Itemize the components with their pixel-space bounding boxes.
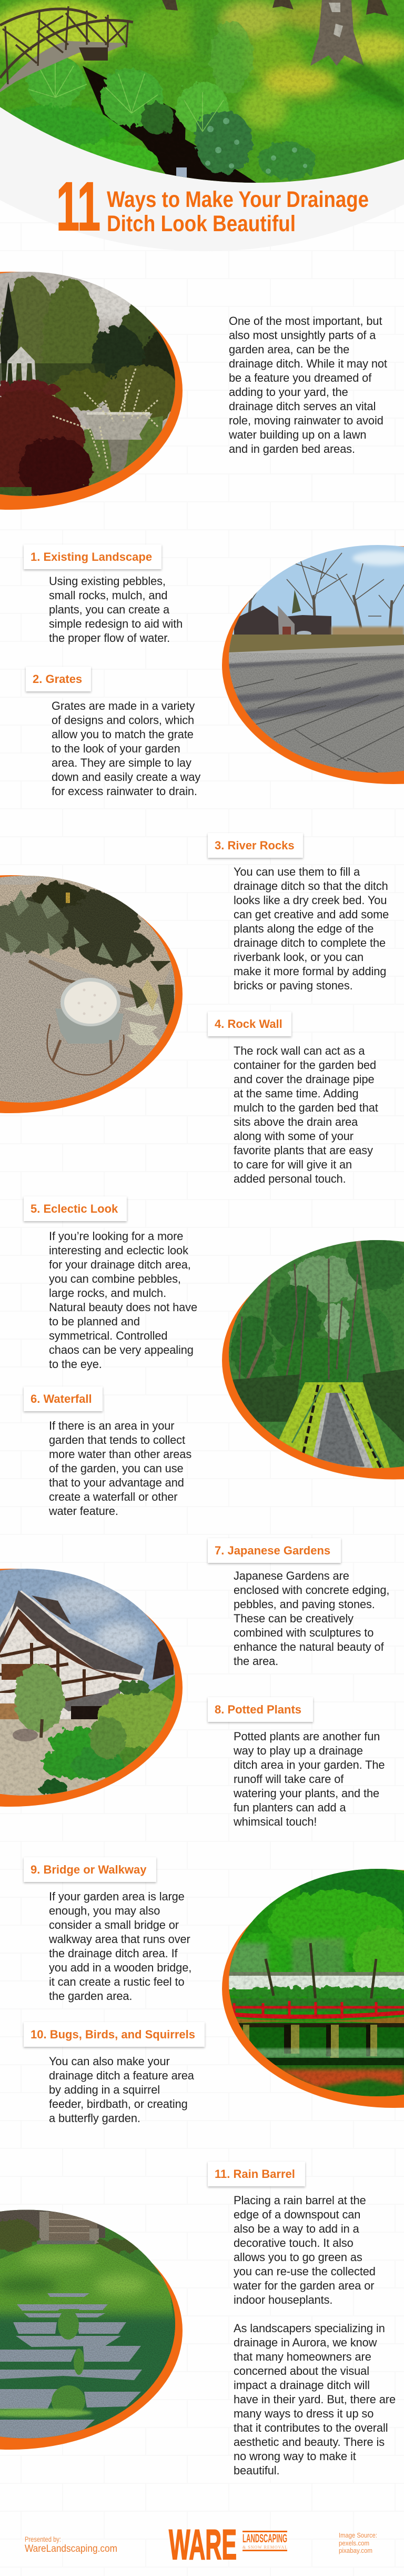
text: existing landscape: plants, you can create a bbox=[49, 603, 169, 616]
text: rock wall: added personal touch. bbox=[234, 1172, 346, 1185]
text: existing landscape bbox=[49, 574, 183, 645]
text: grates: to the look of your garden bbox=[52, 742, 180, 755]
footer: image sources: pixabay.com bbox=[339, 2547, 372, 2554]
text: grates: area. They are simple to lay bbox=[52, 756, 191, 769]
text: rock wall: and cover the drainage pipe bbox=[234, 1073, 375, 1086]
title line 2: Ditch Look Beautiful bbox=[107, 211, 296, 236]
text: waterfall: of the garden, you can use bbox=[49, 1462, 184, 1475]
text: bugs birds and squirrels: by adding in a squirrel bbox=[49, 2083, 160, 2096]
text: eclectic look: Natural beauty does not have bbox=[49, 1301, 197, 1314]
text: potted plants: whimsical touch! bbox=[234, 1815, 317, 1828]
footer: presented by bbox=[25, 2535, 117, 2554]
heading: 4. Rock Wall: 4. Rock Wall bbox=[215, 1017, 282, 1031]
text: potted plants: Potted plants are another fun bbox=[234, 1730, 380, 1743]
heading: 5. Eclectic Look: 5. Eclectic Look bbox=[31, 1202, 118, 1215]
heading: 4. Rock Wall bbox=[208, 1012, 291, 1036]
text: japanese gardens: Japanese Gardens are bbox=[234, 1569, 349, 1582]
stepping stones bbox=[0, 2293, 142, 2439]
text: rain barrel: Placing a rain barrel at the bbox=[234, 2194, 366, 2207]
text: rain barrel: As landscapers specializing in bbox=[234, 2322, 385, 2335]
text: grates bbox=[52, 699, 201, 798]
text: waterfall: create a waterfall or other bbox=[49, 1490, 177, 1503]
text: river rocks: riverbank look, or you can bbox=[234, 950, 363, 964]
text: bugs birds and squirrels: drainage ditch a feature area bbox=[49, 2069, 194, 2082]
heading: 10. Bugs, Birds, and Squirrels bbox=[24, 2022, 205, 2047]
text: potted plants bbox=[234, 1730, 385, 1828]
text: potted plants: fun planters can add a bbox=[234, 1801, 346, 1814]
text: bridge or walkway: consider a small bridge or bbox=[49, 1918, 179, 1931]
photo: formal garden with urn bbox=[0, 272, 183, 510]
text: waterfall: water feature. bbox=[49, 1504, 118, 1518]
heading: 11. Rain Barrel bbox=[208, 2162, 305, 2186]
text: rock wall: container for the garden bed bbox=[234, 1058, 376, 1072]
text: existing landscape: small rocks, mulch, and bbox=[49, 589, 167, 602]
intro text bbox=[229, 314, 387, 455]
text: river rocks: You can use them to fill a bbox=[234, 865, 360, 878]
intro text: drainage ditch serves an vital bbox=[229, 400, 376, 413]
intro text: drainage ditch. While it may not bbox=[229, 357, 387, 370]
text: rock wall: favorite plants that are easy bbox=[234, 1144, 373, 1157]
text: river rocks: drainage ditch to complete the bbox=[234, 936, 386, 949]
text: grates: allow you to match the grate bbox=[52, 728, 194, 741]
photo: gravel and bucket planter bbox=[0, 875, 183, 1113]
text: eclectic look: symmetrical. Controlled bbox=[49, 1329, 167, 1342]
text: bugs birds and squirrels: a butterfly garden. bbox=[49, 2112, 140, 2125]
text: rain barrel: have in their yard. But, there are bbox=[234, 2393, 396, 2406]
text: potted plants: runoff will take care of bbox=[234, 1772, 344, 1786]
heading: 1. Existing Landscape: 1. Existing Landscape bbox=[31, 550, 152, 563]
text: japanese gardens: enhance the natural beauty of bbox=[234, 1640, 384, 1653]
text: waterfall: If there is an area in your bbox=[49, 1419, 174, 1432]
text: river rocks: plants along the edge of the bbox=[234, 922, 373, 935]
heading: 1. Existing Landscape bbox=[24, 544, 161, 569]
heading: 5. Eclectic Look bbox=[24, 1196, 127, 1221]
text: eclectic look bbox=[49, 1230, 197, 1371]
bridge bbox=[0, 41, 129, 92]
text: bugs birds and squirrels bbox=[49, 2055, 194, 2125]
text: grates: for excess rainwater to drain. bbox=[52, 785, 197, 798]
heading: 2. Grates: 2. Grates bbox=[33, 672, 82, 686]
text: waterfall bbox=[49, 1419, 191, 1518]
title bbox=[56, 174, 369, 237]
text: bridge or walkway: walkway area that runs over bbox=[49, 1933, 190, 1946]
text: eclectic look: for your drainage ditch area, bbox=[49, 1258, 191, 1271]
text: rain barrel: decorative touch. It also bbox=[234, 2236, 354, 2250]
heading: 11. Rain Barrel: 11. Rain Barrel bbox=[215, 2167, 295, 2181]
footer: image sources bbox=[339, 2531, 377, 2554]
text: eclectic look: chaos can be very appealing bbox=[49, 1343, 194, 1356]
text: bridge or walkway: the drainage ditch area. If bbox=[49, 1947, 178, 1960]
title backdrop: pale arc bbox=[0, 107, 404, 250]
footer: company logo: & SNOW REMOVAL bbox=[243, 2545, 287, 2550]
text: rock wall bbox=[234, 1044, 378, 1185]
trees bbox=[310, 0, 364, 66]
text: rain barrel: no wrong way to make it bbox=[234, 2450, 356, 2463]
ferns and foliage bbox=[0, 21, 316, 180]
text: river rocks: bricks or paving stones. bbox=[234, 979, 353, 992]
text: waterfall: that to your advantage and bbox=[49, 1476, 184, 1489]
intro text: role, moving rainwater to avoid bbox=[229, 414, 383, 427]
text: rain barrel: allows you to go green as bbox=[234, 2251, 362, 2264]
intro text: and in garden bed areas. bbox=[229, 442, 355, 455]
text: bridge or walkway: the garden area. bbox=[49, 1989, 132, 2003]
text: rain barrel: drainage in Aurora, we know bbox=[234, 2336, 377, 2349]
text: river rocks: make it more formal by adding bbox=[234, 965, 386, 978]
heading: 7. Japanese Gardens: 7. Japanese Gardens bbox=[215, 1544, 330, 1557]
text: bridge or walkway bbox=[49, 1890, 191, 2003]
text: grates: down and easily create a way bbox=[52, 770, 200, 784]
text: rock wall: mulch to the garden bed that bbox=[234, 1101, 378, 1114]
text: rain barrel: that it contributes to the overall bbox=[234, 2421, 388, 2434]
text: rain barrel: you can re-use the collected bbox=[234, 2265, 376, 2278]
footer: image sources: pexels.com bbox=[339, 2539, 369, 2547]
heading: 6. Waterfall bbox=[24, 1386, 103, 1411]
text: japanese gardens: the area. bbox=[234, 1654, 278, 1668]
intro text: water building up on a lawn bbox=[229, 428, 366, 441]
heading: 6. Waterfall: 6. Waterfall bbox=[31, 1392, 92, 1405]
text: japanese gardens bbox=[234, 1569, 389, 1668]
heading: 3. River Rocks: 3. River Rocks bbox=[215, 839, 295, 852]
text: existing landscape: the proper flow of water. bbox=[49, 631, 170, 645]
text: eclectic look: interesting and eclectic look bbox=[49, 1244, 188, 1257]
text: rain barrel: indoor houseplants. bbox=[234, 2293, 332, 2306]
text: bridge or walkway: enough, you may also bbox=[49, 1904, 160, 1917]
heading: 10. Bugs, Birds, and Squirrels: 10. Bugs, Birds, and Squirrels bbox=[31, 2028, 195, 2041]
text: existing landscape: Using existing pebbles, bbox=[49, 574, 166, 588]
urn bbox=[83, 413, 153, 440]
photo: japanese temple garden bbox=[0, 1569, 183, 1807]
text: bugs birds and squirrels: You can also make your bbox=[49, 2055, 170, 2068]
text: rock wall: along with some of your bbox=[234, 1130, 354, 1143]
text: rock wall: sits above the drain area bbox=[234, 1115, 358, 1128]
heading: 2. Grates bbox=[26, 667, 91, 691]
intro text: be a feature you dreamed of bbox=[229, 371, 371, 384]
text: potted plants: watering your plants, and the bbox=[234, 1787, 379, 1800]
text: bridge or walkway: it can create a rustic feel to bbox=[49, 1975, 184, 1988]
heading: 3. River Rocks bbox=[208, 833, 303, 858]
ditch bbox=[83, 66, 259, 184]
heading: 8. Potted Plants bbox=[208, 1697, 313, 1722]
footer: presented by: Presented by: bbox=[25, 2535, 61, 2543]
text: waterfall: garden that tends to collect bbox=[49, 1433, 185, 1446]
text: eclectic look: you can combine pebbles, bbox=[49, 1272, 181, 1285]
text: rain barrel: edge of a downspout can bbox=[234, 2208, 360, 2221]
text: bridge or walkway: you add in a wooden bridge, bbox=[49, 1961, 191, 1974]
photo: paved driveway bbox=[222, 545, 404, 784]
text: rock wall: at the same time. Adding bbox=[234, 1087, 359, 1100]
photo: red bridge over a pond bbox=[222, 1869, 404, 2108]
heading: 8. Potted Plants: 8. Potted Plants bbox=[215, 1703, 301, 1716]
text: rain barrel: also be a way to add in a bbox=[234, 2222, 359, 2235]
footer: presented by: WareLandscaping.com bbox=[25, 2543, 117, 2554]
text: river rocks: can get creative and add some bbox=[234, 908, 389, 921]
text: rain barrel: aesthetic and beauty. There is bbox=[234, 2435, 385, 2449]
text: grates: of designs and colors, which bbox=[52, 714, 194, 727]
text: rain barrel: concerned about the visual bbox=[234, 2364, 369, 2377]
text: eclectic look: to be planned and bbox=[49, 1315, 140, 1328]
red bridge bbox=[229, 2001, 404, 2019]
footer: image sources: Image Source: bbox=[339, 2531, 377, 2539]
intro text: adding to your yard, the bbox=[229, 385, 348, 399]
text: potted plants: way to play up a drainage bbox=[234, 1744, 363, 1757]
text: rain barrel bbox=[234, 2194, 396, 2477]
text: rain barrel: water for the garden area or bbox=[234, 2279, 374, 2292]
text: rock wall: The rock wall can act as a bbox=[234, 1044, 365, 1057]
gazebo bbox=[6, 346, 36, 382]
hero photo: bridge over a garden ditch bbox=[0, 0, 404, 183]
text: existing landscape: simple redesign to aid with bbox=[49, 617, 183, 630]
bucket bbox=[55, 1008, 124, 1044]
text: waterfall: more water than other areas bbox=[49, 1448, 191, 1461]
intro text: garden area, can be the bbox=[229, 343, 349, 356]
text: japanese gardens: pebbles, and paving stones. bbox=[234, 1598, 375, 1611]
text: grates: Grates are made in a variety bbox=[52, 699, 195, 712]
text: eclectic look: large rocks, and mulch. bbox=[49, 1286, 166, 1300]
photo: forest walkway bbox=[222, 1240, 404, 1480]
heading: 9. Bridge or Walkway bbox=[24, 1857, 156, 1882]
text: eclectic look: to the eye. bbox=[49, 1358, 102, 1371]
text: river rocks bbox=[234, 865, 389, 992]
text: rain barrel: many ways to dress it up so bbox=[234, 2407, 373, 2420]
text: japanese gardens: enclosed with concrete edging, bbox=[234, 1583, 389, 1597]
text: rock wall: to care for will give it an bbox=[234, 1158, 352, 1171]
intro text: also most unsightly parts of a bbox=[229, 329, 376, 342]
photo: stepping stones through a lawn bbox=[0, 2210, 183, 2450]
text: river rocks: drainage ditch so that the ditch bbox=[234, 879, 388, 893]
building bbox=[0, 1590, 145, 1732]
text: japanese gardens: combined with sculptures to bbox=[234, 1626, 373, 1639]
text: rain barrel: impact a drainage ditch will bbox=[234, 2379, 370, 2392]
text: bridge or walkway: If your garden area is large bbox=[49, 1890, 185, 1903]
text: bugs birds and squirrels: feeder, birdbath, or creating bbox=[49, 2097, 188, 2111]
right leaves bbox=[124, 1003, 163, 1045]
text: river rocks: looks like a dry creek bed. You bbox=[234, 894, 387, 907]
text: rain barrel: beautiful. bbox=[234, 2464, 279, 2477]
text: japanese gardens: These can be creatively bbox=[234, 1612, 354, 1625]
text: rain barrel: that many homeowners are bbox=[234, 2350, 371, 2363]
text: eclectic look: If you’re looking for a more bbox=[49, 1230, 183, 1243]
intro text: One of the most important, but bbox=[229, 314, 382, 328]
text: potted plants: ditch area in your garden. The bbox=[234, 1758, 385, 1771]
heading: 9. Bridge or Walkway: 9. Bridge or Walkway bbox=[31, 1863, 146, 1876]
heading: 7. Japanese Gardens bbox=[208, 1538, 341, 1563]
